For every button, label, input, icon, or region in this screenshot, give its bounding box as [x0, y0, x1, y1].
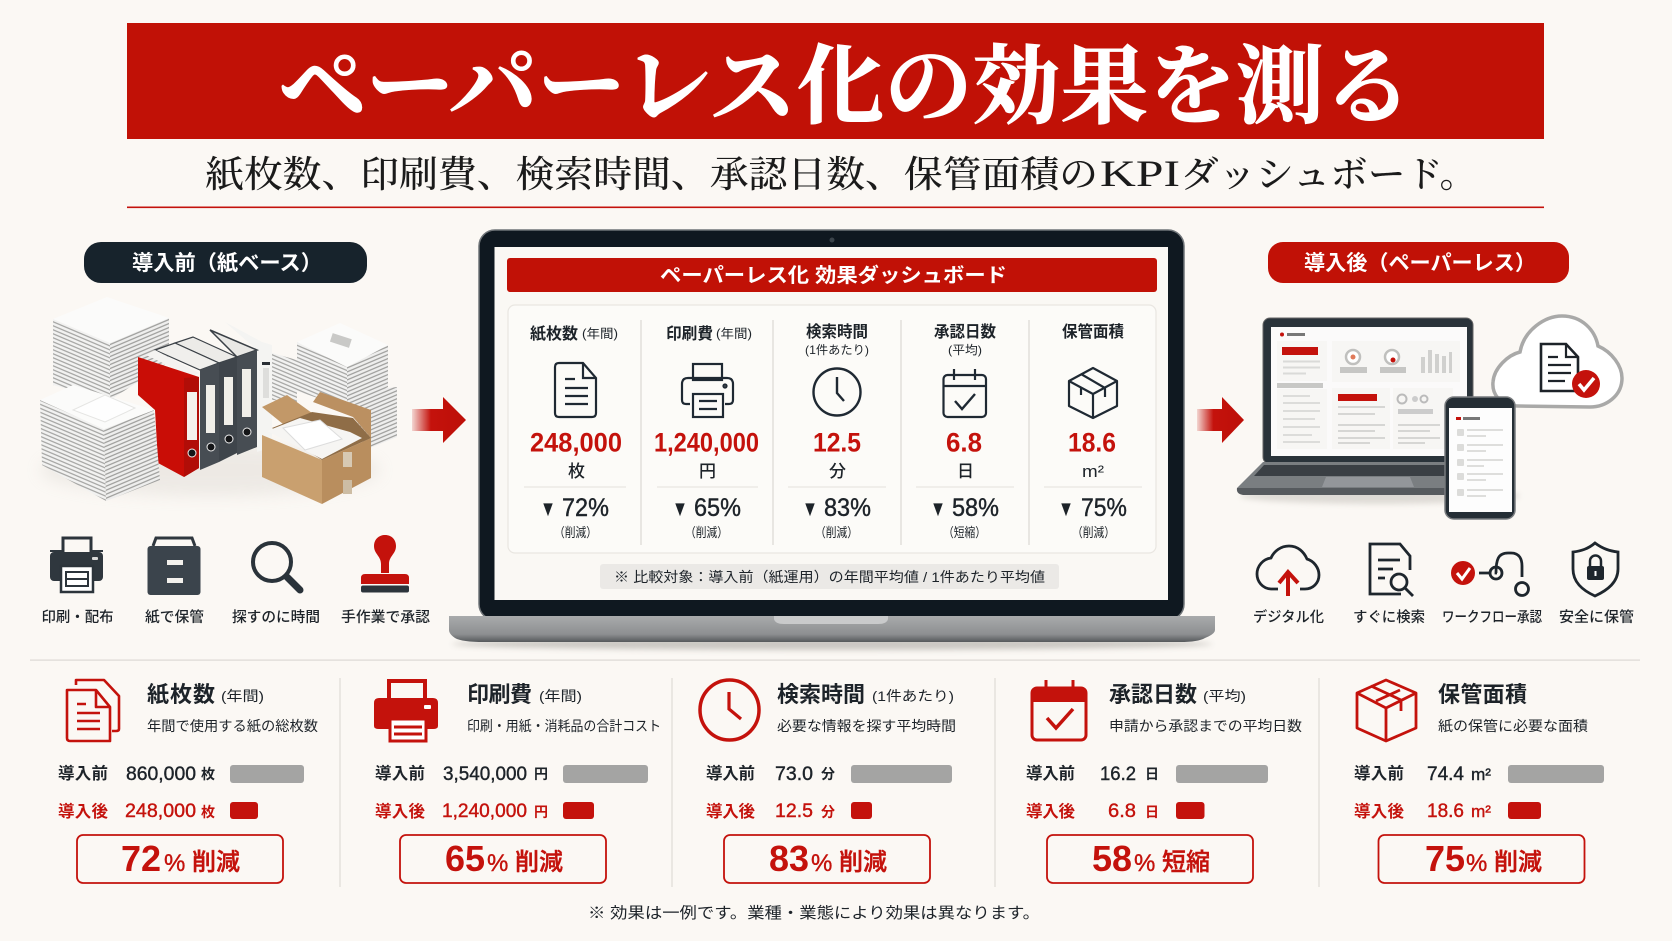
KPI panel: storage area: 18.6	[1427, 801, 1464, 822]
KPI panel: storage area: 75	[1425, 838, 1465, 879]
card: paper count: （削減）	[554, 525, 597, 540]
KPI panel: paper count: 枚	[201, 804, 215, 820]
KPI panel: search time: (1件あたり)	[872, 688, 954, 704]
card: printing cost: ▼	[672, 496, 688, 521]
KPI panel: storage area: 導入前	[1354, 764, 1404, 783]
KPI panel: printing cost: 印刷費	[467, 682, 532, 707]
label: secure storage: 安全に保管	[1559, 608, 1634, 626]
label: instant search: すぐに検索	[1353, 609, 1425, 626]
KPI panel: approval days: 16.2	[1100, 764, 1136, 785]
KPI panel: search time: 分	[821, 766, 835, 782]
KPI panel: paper count: 72	[121, 838, 161, 879]
card: printing cost	[654, 324, 759, 540]
icon: stamp	[361, 535, 409, 592]
label: printing: 印刷・配布	[42, 609, 114, 626]
card: search time: 83%	[824, 494, 871, 522]
KPI panel: printing cost: 印刷・用紙・消耗品の合計コスト	[467, 718, 661, 734]
title banner	[127, 23, 1544, 139]
KPI panel: search time: 73.0	[775, 764, 813, 785]
label: manual approval: 手作業で承認	[341, 609, 431, 626]
card: search time: 検索時間	[806, 322, 868, 341]
card: paper count: 枚	[568, 462, 585, 481]
KPI panel: storage area: %	[1466, 850, 1487, 877]
KPI panel: approval days: 日	[1145, 766, 1159, 782]
paper stack back left	[53, 297, 169, 400]
section rule	[30, 660, 1640, 661]
KPI panel: approval days: 承認日数	[1109, 682, 1197, 707]
KPI panel: search time: 導入後	[706, 801, 756, 821]
KPI panel: search time: %	[811, 850, 832, 877]
card: approval days	[930, 323, 999, 540]
KPI panel: search time: 削減	[839, 849, 887, 876]
card: approval days: (平均)	[948, 343, 982, 357]
card: printing cost: 65%	[694, 494, 741, 522]
KPI panel: approval days: 導入前	[1026, 764, 1075, 783]
card: storage area	[1058, 322, 1127, 540]
KPI panel: printing cost	[374, 681, 661, 883]
card: storage area: m²	[1082, 462, 1104, 481]
KPI panel: approval days: 短縮	[1162, 849, 1210, 876]
icon: printer solid	[374, 681, 438, 741]
KPI panel: paper count: 導入後	[58, 801, 108, 821]
KPI panel: paper count	[58, 680, 318, 883]
phone	[1445, 397, 1515, 519]
KPI panel: approval days: (平均)	[1203, 688, 1246, 704]
icon: calendar	[944, 369, 986, 417]
KPI panel: printing cost: 削減	[515, 849, 563, 876]
icon: cloud upload	[1257, 546, 1319, 596]
label: paper storage: 紙で保管	[145, 608, 204, 626]
KPI panel: search time: 必要な情報を探す平均時間	[777, 718, 956, 734]
dashboard cards frame	[508, 305, 1156, 553]
card: printing cost: （削減）	[685, 525, 728, 540]
card: paper count: ▼	[540, 496, 556, 521]
KPI panel: paper count: (年間)	[221, 688, 264, 704]
KPI panel: search time: 83	[769, 838, 809, 879]
binder: red	[138, 350, 199, 477]
KPI panel: paper count: 枚	[201, 766, 215, 782]
card: paper count: 紙枚数	[530, 324, 578, 343]
laptop lid	[479, 230, 1184, 620]
card: storage area: 18.6	[1068, 428, 1116, 458]
label: digitization: デジタル化	[1253, 608, 1324, 626]
card: storage area: 75%	[1081, 494, 1127, 522]
KPI panel: printing cost: (年間)	[539, 688, 582, 704]
KPI panel: approval days: 導入後	[1026, 801, 1076, 821]
card: printing cost: 円	[699, 462, 716, 481]
KPI panel: approval days: 日	[1145, 804, 1159, 820]
icon: clock red	[700, 680, 759, 740]
dashboard title bar: ペーパーレス化 効果ダッシュボード	[660, 263, 1007, 287]
KPI panel: printing cost: 導入前	[375, 764, 425, 783]
illustration: paper stacks, binders and box	[40, 297, 397, 504]
card: paper count: 248,000	[530, 428, 622, 458]
comparison note: ※ 比較対象：導入前（紙運用）の年間平均値 / 1件あたり平均値	[614, 569, 1045, 585]
paper stack front left	[40, 385, 160, 501]
icon: printer	[50, 538, 103, 592]
KPI panel: paper count: 年間で使用する紙の総枚数	[147, 718, 318, 734]
KPI panel: storage area	[1354, 680, 1604, 883]
icon: clock	[814, 368, 860, 416]
card: approval days: 承認日数	[934, 323, 996, 341]
KPI panel: paper count: 248,000	[125, 801, 196, 822]
icon: cabinet	[148, 538, 200, 595]
title banner: ペーパーレス化の効果を測る	[278, 39, 1412, 135]
card: paper count: (年間)	[582, 327, 618, 341]
arrow: left to dashboard	[412, 397, 466, 443]
KPI panel: search time	[700, 680, 956, 883]
KPI panel: approval days: 申請から承認までの平均日数	[1109, 718, 1302, 734]
main laptop dashboard	[449, 230, 1215, 650]
card: approval days: 58%	[952, 494, 999, 522]
KPI panel: paper count: 削減	[192, 849, 240, 876]
subtitle: KPI	[1100, 154, 1180, 195]
KPI panel: search time: 分	[821, 804, 835, 820]
card: search time: 12.5	[813, 428, 861, 458]
pill: before: 導入前（紙ベース）	[132, 252, 322, 275]
icon: shield	[1573, 543, 1618, 596]
card: search time: (1件あたり)	[805, 343, 869, 357]
KPI panel: printing cost: 65	[445, 838, 485, 879]
comparison note	[600, 564, 1059, 589]
KPI panel: printing cost: 3,540,000	[443, 764, 527, 785]
binder: dark 2	[175, 337, 237, 462]
dashboard title bar	[507, 258, 1157, 292]
KPI panel: approval days	[1026, 680, 1302, 883]
subtitle	[205, 154, 1477, 196]
pill: after	[1268, 242, 1569, 283]
icon: document	[555, 363, 596, 417]
paper stacks right	[272, 323, 397, 450]
KPI panel: paper count: %	[164, 850, 185, 877]
laptop base	[449, 616, 1215, 642]
card: printing cost: 1,240,000	[654, 428, 759, 458]
icon: magnifier	[253, 543, 300, 590]
KPI panel: storage area: 削減	[1494, 849, 1542, 876]
mini dashboard content	[1277, 332, 1460, 449]
small laptop	[1237, 318, 1473, 495]
binder: dark 3	[210, 330, 257, 455]
cardboard box	[262, 392, 371, 504]
binder: white	[225, 322, 272, 452]
KPI panel: storage area: m²	[1471, 802, 1491, 821]
label: workflow approval: ワークフロー承認	[1442, 609, 1542, 626]
subtitle: 紙枚数、印刷費、検索時間、承認日数、保管面積の	[205, 154, 1098, 196]
arrow: dashboard to after	[1197, 397, 1244, 443]
subtitle: ダッシュボード。	[1181, 155, 1477, 196]
KPI panel: paper count: 860,000	[126, 764, 196, 785]
KPI panel: paper count: 紙枚数	[147, 682, 215, 707]
KPI panel: storage area: m²	[1471, 765, 1491, 784]
KPI panel: printing cost: %	[487, 850, 508, 877]
card: storage area: ▼	[1058, 496, 1074, 521]
card: approval days: 6.8	[946, 428, 982, 458]
dashboard screen	[494, 247, 1168, 600]
card: search time	[802, 322, 871, 540]
KPI panel: paper count: 導入前	[58, 764, 108, 783]
KPI panel: search time: 12.5	[775, 801, 813, 822]
KPI panel: approval days: 58	[1092, 838, 1132, 879]
icon: document search	[1370, 544, 1413, 596]
KPI panel: approval days: %	[1134, 850, 1155, 877]
card: search time: 分	[829, 462, 846, 481]
illustration: devices and cloud	[1237, 316, 1622, 519]
pill: after: 導入後（ペーパーレス）	[1304, 252, 1536, 275]
card: paper count	[530, 324, 622, 540]
KPI panel: printing cost: 円	[534, 766, 548, 782]
card: storage area: 保管面積	[1062, 322, 1124, 341]
card: printing cost: (年間)	[716, 327, 752, 341]
card: printing cost: 印刷費	[666, 324, 713, 343]
KPI panel: storage area: 導入後	[1354, 801, 1404, 821]
cloud with document	[1493, 316, 1622, 407]
icon: calendar red	[1032, 680, 1086, 740]
icon: box red	[1357, 680, 1416, 741]
KPI panel: search time: 検索時間	[777, 682, 865, 707]
KPI panel: storage area: 74.4	[1427, 764, 1464, 785]
card: search time: ▼	[802, 496, 818, 521]
card: search time: （削減）	[815, 525, 858, 540]
KPI panel: printing cost: 1,240,000	[442, 801, 527, 822]
icon: box	[1069, 368, 1117, 418]
KPI panel: approval days: 6.8	[1108, 801, 1136, 822]
card: paper count: 72%	[562, 494, 609, 522]
card: approval days: ▼	[930, 496, 946, 521]
icon: papers	[67, 680, 119, 741]
footnote: ※ 効果は一例です。業種・業態により効果は異なります。	[588, 904, 1040, 922]
card: storage area: （削減）	[1072, 525, 1115, 540]
KPI panel: storage area: 保管面積	[1438, 682, 1527, 707]
card: approval days: （短縮）	[943, 525, 986, 540]
card: approval days: 日	[957, 462, 974, 481]
pill: before	[84, 242, 367, 283]
label: searching: 探すのに時間	[232, 609, 320, 626]
KPI panel: printing cost: 円	[534, 804, 548, 820]
KPI panel: storage area: 紙の保管に必要な面積	[1438, 718, 1588, 734]
KPI panel: printing cost: 導入後	[375, 801, 426, 821]
icon: printer outline	[682, 364, 733, 417]
icon: workflow	[1451, 553, 1528, 596]
binder: dark 1	[155, 343, 219, 470]
KPI panel: search time: 導入前	[706, 764, 755, 783]
